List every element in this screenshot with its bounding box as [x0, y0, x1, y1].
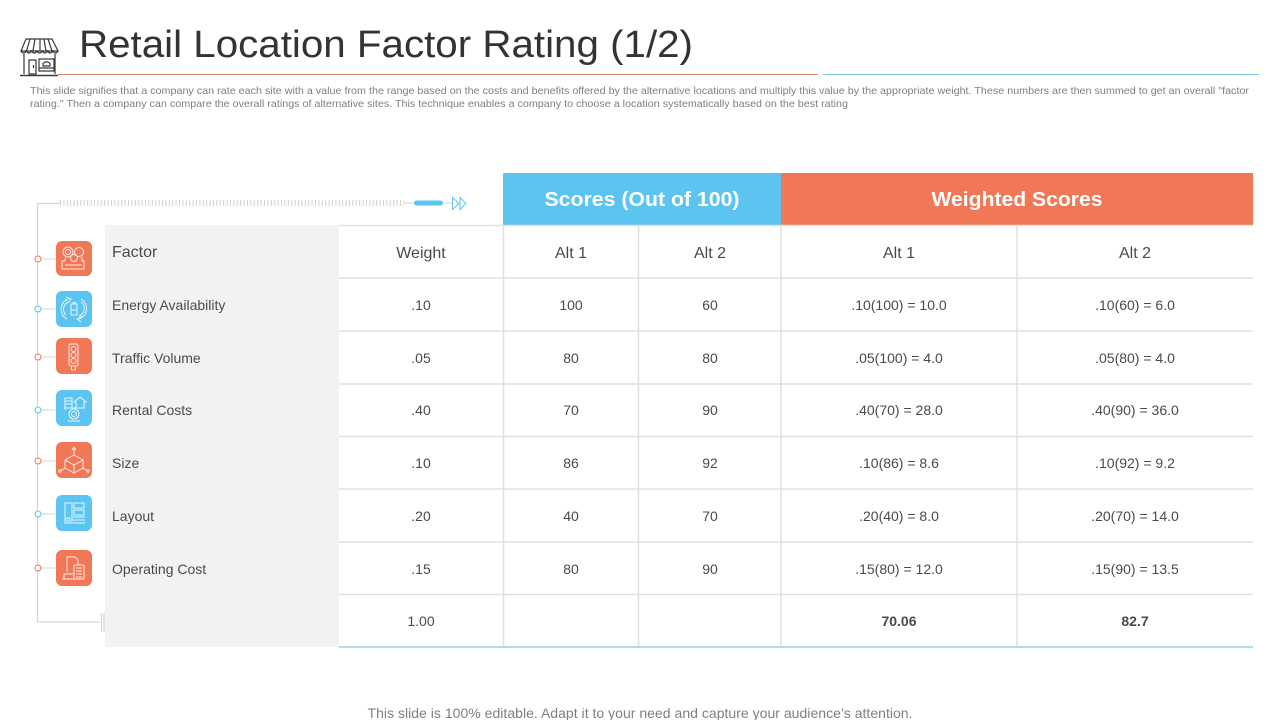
icon: factor [56, 241, 92, 276]
row: energy availability: .10(60) = 6.0 [1095, 297, 1175, 313]
table header row: Weight [396, 245, 446, 262]
row: operating cost: 80 [563, 561, 579, 577]
row: operating cost: .15 [411, 561, 431, 577]
icon: size [56, 442, 92, 478]
row: size: .10(86) = 8.6 [859, 455, 939, 471]
icon: operating cost [56, 550, 92, 586]
row: rental costs: .40(70) = 28.0 [855, 402, 943, 418]
row: totals: 1.00 [407, 613, 435, 629]
row: traffic volume: .05(100) = 4.0 [855, 350, 943, 366]
row: energy availability: .10(100) = 10.0 [851, 297, 947, 313]
intro text [30, 85, 1250, 110]
icon: traffic light [56, 338, 92, 374]
icon: storefront [20, 39, 58, 76]
row: traffic volume: 80 [702, 350, 718, 366]
icon: rental [56, 390, 92, 426]
table header row: Alt 2 [694, 245, 726, 262]
title underline blue [823, 74, 1259, 75]
row: totals: 82.7 [1121, 613, 1149, 629]
row: size: .10 [411, 455, 431, 471]
row: totals [407, 613, 1149, 629]
row: energy availability: 60 [702, 297, 718, 313]
table header row [112, 244, 1151, 262]
row: layout [112, 508, 1179, 524]
row: rental costs: 90 [702, 402, 718, 418]
row: rental costs: .40 [411, 402, 431, 418]
row: traffic volume: 80 [563, 350, 579, 366]
row: layout: .20(40) = 8.0 [859, 508, 939, 524]
row: operating cost: .15(80) = 12.0 [855, 561, 943, 577]
row: energy availability: Energy Availability [112, 297, 225, 313]
row: operating cost: 90 [702, 561, 718, 577]
title: Retail Location Factor Rating (1/2) [79, 24, 693, 66]
icon: layout [56, 495, 92, 531]
table header row: Alt 1 [883, 245, 915, 262]
row: layout: 70 [702, 508, 718, 524]
table header row: Alt 2 [1119, 245, 1151, 262]
factor column background [105, 225, 339, 647]
row: traffic volume: .05 [411, 350, 431, 366]
row: traffic volume [112, 350, 1175, 366]
header: scores: Scores (Out of 100) [544, 189, 740, 211]
row: energy availability: .10 [411, 297, 431, 313]
table header row: Alt 1 [555, 245, 587, 262]
header: weighted scores: Weighted Scores [932, 189, 1102, 211]
row: size: 92 [702, 455, 718, 471]
timeline connector [35, 198, 466, 632]
row: size: 86 [563, 455, 579, 471]
row: rental costs: .40(90) = 36.0 [1091, 402, 1179, 418]
row: operating cost: .15(90) = 13.5 [1091, 561, 1179, 577]
intro text: rating." Then a company can compare the overall ratings of alternative sites. This technique enables a company to choose a location systematically based on the best rating [30, 98, 848, 110]
row: totals: 70.06 [881, 613, 917, 629]
row: size: Size [112, 455, 139, 471]
row: layout: .20 [411, 508, 431, 524]
row: rental costs: 70 [563, 402, 579, 418]
row: layout: Layout [112, 508, 154, 524]
title underline orange [58, 74, 818, 75]
intro text: This slide signifies that a company can rate each site with a value from the range based on the costs and benefits offered by the alternative locations and multiply this value by the appropriate weight. These numbers are then summed to get an overall "factor [30, 85, 1250, 97]
table header row: Factor [112, 244, 158, 261]
row: size: .10(92) = 9.2 [1095, 455, 1175, 471]
row: traffic volume: Traffic Volume [112, 350, 201, 366]
row: energy availability: 100 [559, 297, 583, 313]
header: scores [503, 173, 781, 225]
row: traffic volume: .05(80) = 4.0 [1095, 350, 1175, 366]
row: operating cost: Operating Cost [112, 561, 206, 577]
row: layout: 40 [563, 508, 579, 524]
row: layout: .20(70) = 14.0 [1091, 508, 1179, 524]
row: energy availability [112, 297, 1175, 313]
row: size [112, 455, 1175, 471]
header: weighted scores [781, 173, 1253, 225]
icon: energy [56, 291, 92, 327]
row: rental costs [112, 402, 1179, 418]
row: rental costs: Rental Costs [112, 402, 192, 418]
row: operating cost [112, 561, 1179, 577]
